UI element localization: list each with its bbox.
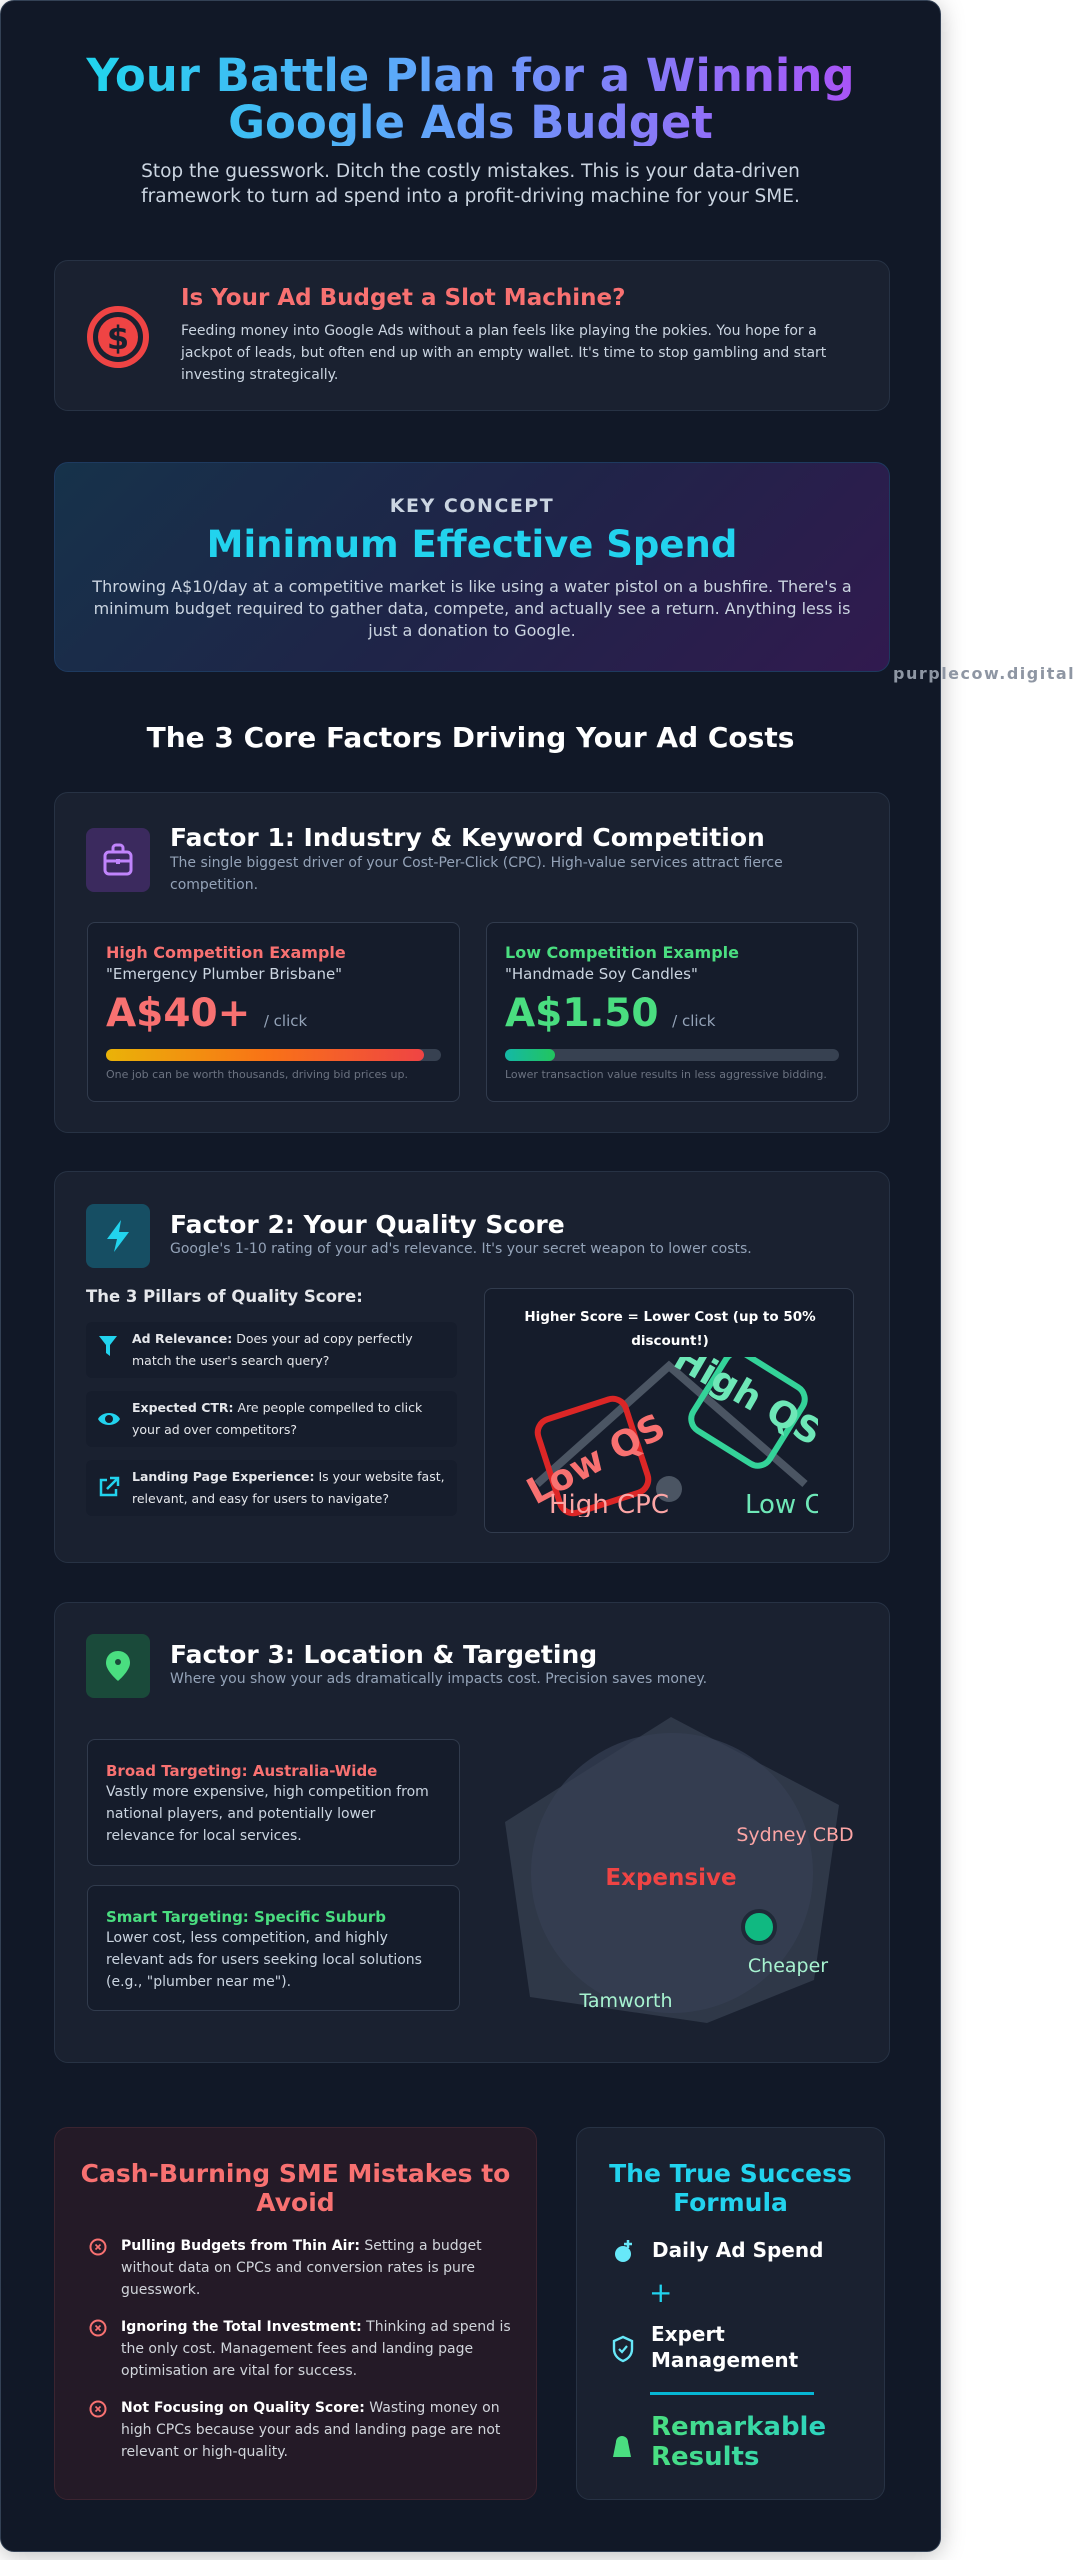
- title: Google Ads Budget: [228, 96, 713, 149]
- panel: key concept: [54, 462, 890, 672]
- body: Throwing A$10/day at a competitive market is like using a water pistol on a bushfire. There's a minimum budget required to gather data, compete, and actually see a return. Anything less is just a donation to Google.: [92, 577, 852, 640]
- icon: briefcase: [86, 828, 150, 892]
- card: high competition: A$40+ / click: [106, 991, 307, 1036]
- pillar: expected ctr: Expected CTR: Are people compelled to click your ad over competitors?: [132, 1400, 422, 1437]
- panel: success formula: [576, 2127, 885, 2500]
- mistake 3: Not Focusing on Quality Score: Wasting money on high CPCs because your ads and landing page are not relevant or high-quality.: [121, 2400, 500, 2460]
- card: low competition: "Handmade Soy Candles": [505, 965, 698, 983]
- description: Google's 1-10 rating of your ad's relevance. It's your secret weapon to lower costs.: [170, 1241, 752, 1257]
- card: low competition: Lower transaction value results in less aggressive bidding.: [505, 1068, 827, 1081]
- heading: Minimum Effective Spend: [207, 523, 737, 566]
- title: Your Battle Plan for a Winning: [86, 49, 855, 102]
- item: daily ad spend: Daily Ad Spend: [652, 2238, 823, 2262]
- bar: [106, 1049, 441, 1061]
- chart: targeting map: Sydney CBD: [736, 1824, 854, 1846]
- panel: factor 3: [54, 1602, 890, 2063]
- card: high competition: [87, 922, 460, 1102]
- title: [0, 52, 941, 146]
- card: low competition: A$1.50 / click: [505, 991, 715, 1036]
- panel: mistakes: [54, 2127, 537, 2500]
- heading: [81, 2159, 510, 2217]
- icon: location pin: [86, 1634, 150, 1698]
- icon: bolt: [86, 1204, 150, 1268]
- chart: quality score vs cost: [484, 1288, 854, 1533]
- card: smart targeting: Smart Targeting: Specific Suburb: [106, 1908, 386, 1926]
- chart: quality score vs cost: High QS: [667, 1337, 829, 1454]
- heading: [609, 2159, 852, 2217]
- item: expert management: [612, 2322, 798, 2372]
- icon: slot machine: [87, 306, 149, 368]
- pillar: ad relevance: [86, 1322, 457, 1378]
- card: smart targeting: Lower cost, less competition, and highly relevant ads for users seeking local solutions (e.g., "plumber near me").: [106, 1930, 422, 1990]
- plus: +: [649, 2276, 672, 2309]
- heading: Avoid: [256, 2188, 335, 2217]
- equals line: [650, 2392, 814, 2395]
- bar: [505, 1049, 839, 1061]
- item: remarkable results: Remarkable: [651, 2412, 826, 2442]
- card: low competition: Low Competition Example: [505, 943, 739, 962]
- mistake 2: Ignoring the Total Investment: Thinking ad spend is the only cost. Management fees and landing page optimisation are vital for success.: [121, 2319, 511, 2379]
- panel: factor 2: [54, 1171, 890, 1563]
- item: remarkable results: [613, 2412, 826, 2472]
- pillar: landing page: Landing Page Experience: Is your website fast, relevant, and easy for users to navigate?: [132, 1469, 445, 1506]
- card: high competition: High Competition Example: [106, 943, 346, 962]
- chart: quality score vs cost: High CPC: [549, 1490, 669, 1520]
- heading: Cash-Burning SME Mistakes to: [81, 2159, 510, 2188]
- heading: Is Your Ad Budget a Slot Machine?: [181, 285, 625, 311]
- description: Where you show your ads dramatically impacts cost. Precision saves money.: [170, 1671, 707, 1687]
- heading: Formula: [673, 2188, 788, 2217]
- card: high competition: "Emergency Plumber Brisbane": [106, 965, 342, 983]
- chart: targeting map: Tamworth: [578, 1990, 673, 2012]
- card: broad targeting: [87, 1739, 460, 1866]
- card: broad targeting: Vastly more expensive, high competition from national players, and potentially lower relevance for local services.: [106, 1784, 429, 1844]
- chart: targeting map: Expensive: [605, 1865, 737, 1891]
- body text: Feeding money into Google Ads without a plan feels like playing the pokies. You hope for a jackpot of leads, but often end up with an empty wallet. It's time to stop gambling and start investing strategically.: [181, 323, 826, 383]
- subtitle: Stop the guesswork. Ditch the costly mistakes. This is your data-driven framework to turn ad spend into a profit-driving machine for your SME.: [141, 161, 800, 207]
- panel: factor 1: [54, 792, 890, 1133]
- pillar: expected ctr: [86, 1391, 457, 1447]
- item: expert management: Expert: [651, 2322, 725, 2346]
- chart: quality score vs cost: Low QS: [520, 1406, 672, 1513]
- pillar: ad relevance: Ad Relevance: Does your ad copy perfectly match the user's search query?: [132, 1331, 413, 1368]
- chart: quality score vs cost: Higher Score = Lower Cost (up to 50% discount!): [524, 1309, 816, 1349]
- heading: Factor 1: Industry & Keyword Competition: [170, 823, 765, 852]
- description: The single biggest driver of your Cost-Per-Click (CPC). High-value services attract fierce competition.: [170, 855, 783, 893]
- heading: Factor 2: Your Quality Score: [170, 1210, 565, 1239]
- chart: quality score vs cost: Low CPC: [745, 1490, 854, 1520]
- card: smart targeting: [87, 1885, 460, 2011]
- icon: slot machine: $: [107, 319, 129, 357]
- mistake 1: Pulling Budgets from Thin Air: Setting a budget without data on CPCs and conversion rates is pure guesswork.: [121, 2238, 482, 2298]
- heading: Factor 3: Location & Targeting: [170, 1640, 597, 1669]
- chart: targeting map: Cheaper: [748, 1955, 828, 1977]
- panel: slot machine: [54, 260, 890, 411]
- card: low competition: [486, 922, 858, 1102]
- watermark: purplecow.digital: [893, 664, 1075, 683]
- chart: targeting map: [505, 1717, 854, 2023]
- section heading: The 3 Core Factors Driving Your Ad Costs: [147, 721, 794, 754]
- card: broad targeting: Broad Targeting: Australia-Wide: [106, 1762, 377, 1780]
- item: expert management: Management: [651, 2348, 798, 2372]
- label: KEY CONCEPT: [390, 495, 554, 517]
- heading: The True Success: [609, 2159, 852, 2188]
- pillars heading: The 3 Pillars of Quality Score:: [86, 1287, 363, 1306]
- item: remarkable results: Results: [651, 2442, 759, 2472]
- pillar: landing page: [86, 1460, 457, 1516]
- card: high competition: One job can be worth thousands, driving bid prices up.: [106, 1068, 408, 1081]
